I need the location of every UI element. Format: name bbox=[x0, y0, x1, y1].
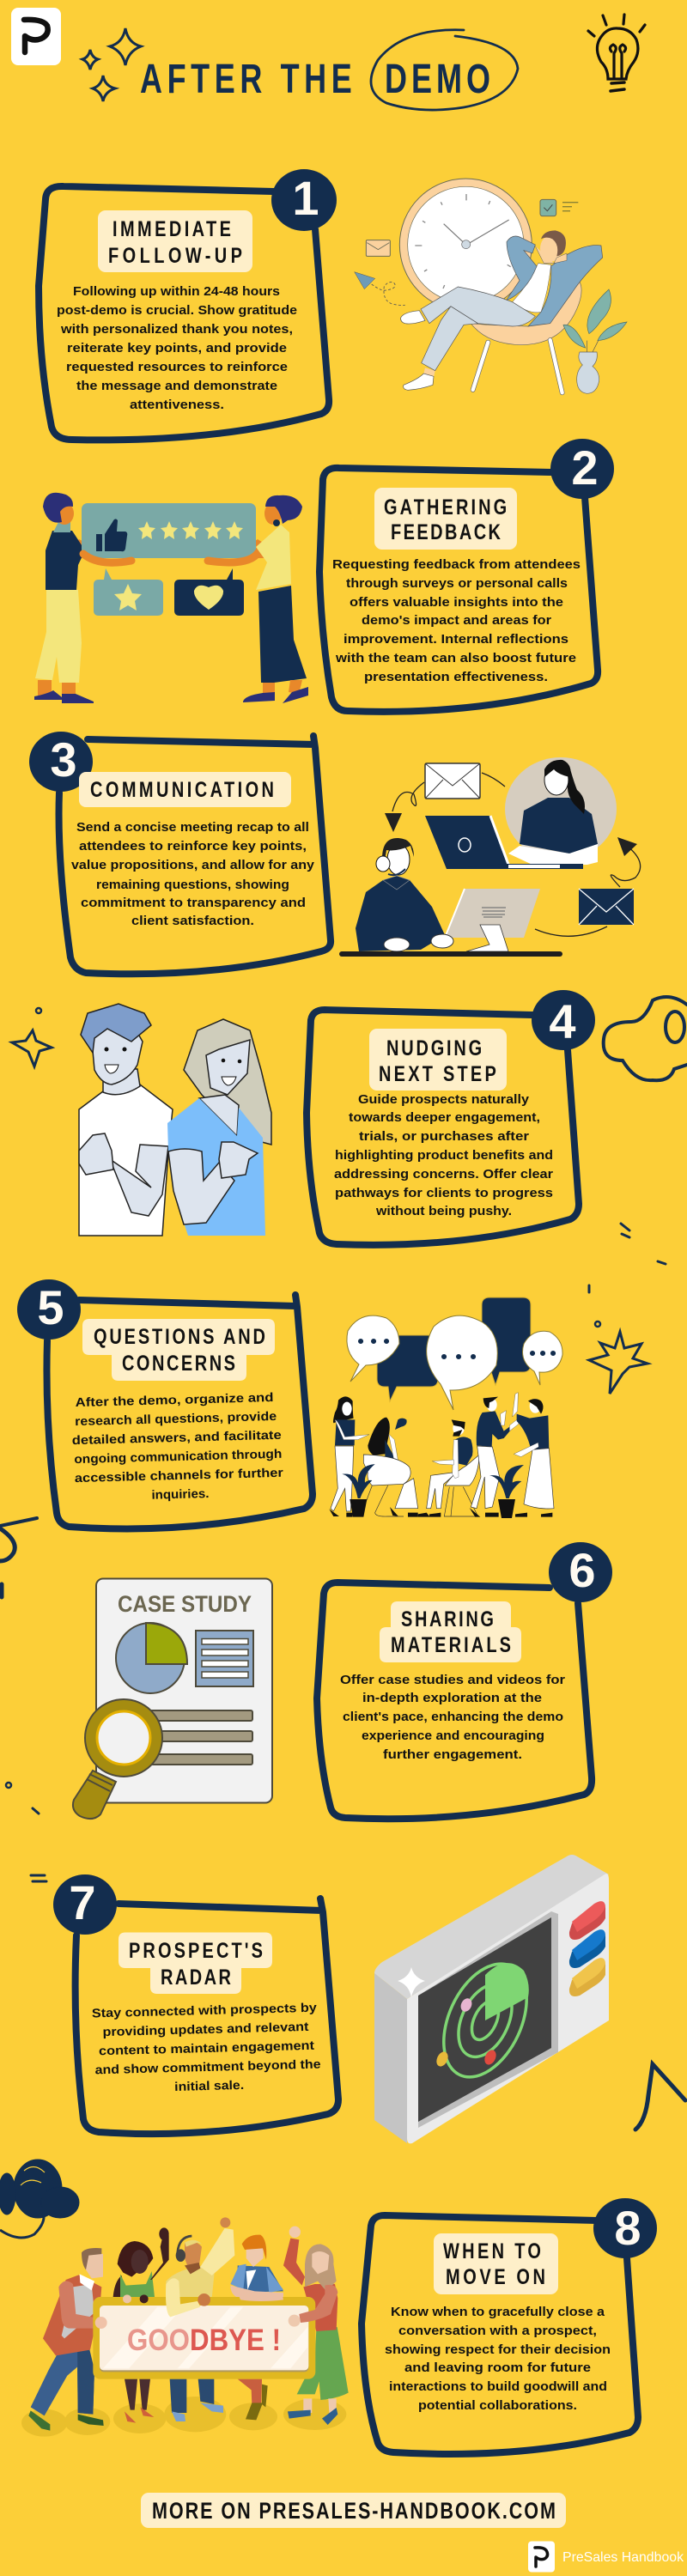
body text: interactions to build goodwill and bbox=[389, 2380, 607, 2394]
body text: offers valuable insights into the bbox=[350, 596, 563, 610]
title: DEMO bbox=[385, 56, 490, 101]
number badge: 4 bbox=[549, 994, 576, 1048]
heading bbox=[369, 1029, 507, 1091]
footer logo bbox=[528, 2542, 684, 2573]
number badge bbox=[17, 1279, 81, 1340]
icon: light bulb bbox=[588, 15, 645, 91]
body text bbox=[57, 285, 297, 412]
number badge: 8 bbox=[614, 2201, 641, 2255]
body text: initial sale. bbox=[174, 2079, 244, 2094]
decoration: right side doodles bbox=[0, 997, 687, 2129]
heading bbox=[119, 1932, 272, 1994]
heading bbox=[82, 1319, 275, 1381]
body text: post-demo is crucial. Show gratitude bbox=[57, 304, 297, 318]
panel outline bbox=[46, 1295, 313, 1528]
panel 2: gathering feedback bbox=[34, 439, 614, 712]
heading bbox=[434, 2233, 558, 2294]
panel outline bbox=[317, 1583, 592, 1819]
heading: RADAR bbox=[161, 1965, 231, 1990]
body text: client's pace, enhancing the demo bbox=[343, 1710, 563, 1724]
panel outline bbox=[59, 736, 331, 974]
body text: with the team can also boost future bbox=[335, 652, 576, 665]
body text: requested resources to reinforce bbox=[66, 361, 288, 374]
heading: MATERIALS bbox=[391, 1633, 511, 1657]
body text: further engagement. bbox=[383, 1748, 522, 1762]
panel 4: nudging next step bbox=[79, 990, 595, 1245]
sign text: GOODBYE ! bbox=[127, 2324, 281, 2357]
panel outline bbox=[76, 1899, 338, 2134]
number badge: 5 bbox=[37, 1280, 64, 1334]
number badge bbox=[532, 990, 595, 1050]
body text: After the demo, organize and bbox=[75, 1391, 274, 1410]
panel outline bbox=[362, 2215, 638, 2454]
number badge bbox=[53, 1874, 117, 1935]
body text bbox=[334, 1093, 553, 1218]
body text bbox=[385, 2306, 611, 2413]
panel outline bbox=[39, 186, 329, 440]
body text: attendees to reinforce key points, bbox=[79, 840, 307, 854]
body text: detailed answers, and facilitate bbox=[72, 1429, 282, 1448]
body text bbox=[70, 1391, 284, 1504]
panel 6: sharing materials bbox=[73, 1542, 612, 1819]
body text: trials, or purchases after bbox=[359, 1130, 529, 1144]
panel 8: when to move on bbox=[362, 2198, 657, 2454]
footer call to action bbox=[141, 2493, 566, 2528]
header bbox=[11, 8, 645, 110]
body text: value propositions, and allow for any bbox=[71, 859, 314, 872]
panel outline bbox=[307, 1010, 579, 1245]
heading: SHARING bbox=[401, 1607, 494, 1631]
heading bbox=[374, 488, 517, 550]
body text: the message and demonstrate bbox=[76, 380, 277, 393]
heading: CONCERNS bbox=[122, 1352, 235, 1376]
number badge bbox=[550, 439, 614, 499]
body text: pathways for clients to progress bbox=[335, 1187, 553, 1200]
body text: addressing concerns. Offer clear bbox=[334, 1168, 553, 1182]
number badge bbox=[549, 1542, 612, 1602]
body text: Stay connected with prospects by bbox=[92, 2002, 317, 2020]
number badge bbox=[271, 169, 337, 231]
body text: and leaving room for future bbox=[404, 2361, 591, 2375]
body text: towards deeper engagement, bbox=[349, 1111, 540, 1125]
heading: FOLLOW-UP bbox=[108, 244, 242, 268]
body text: experience and encouraging bbox=[362, 1729, 544, 1743]
body text: Send a concise meeting recap to all bbox=[76, 821, 309, 835]
body text: client satisfaction. bbox=[131, 914, 254, 928]
logo bbox=[11, 8, 61, 65]
body text: without being pushy. bbox=[375, 1205, 512, 1218]
body text bbox=[71, 821, 314, 928]
body text: remaining questions, showing bbox=[96, 878, 289, 892]
illustration: man relaxing by clock bbox=[355, 179, 627, 393]
illustration: case study document bbox=[73, 1578, 272, 1819]
body text: in-depth exploration at the bbox=[362, 1692, 542, 1705]
number badge: 7 bbox=[69, 1875, 96, 1929]
decoration: scribble bbox=[0, 2160, 79, 2238]
illustration: team discussion bbox=[329, 1393, 554, 1518]
heading: PROSPECT'S bbox=[129, 1939, 263, 1963]
icon: sparkles bbox=[82, 28, 141, 101]
illustration: email exchange bbox=[339, 757, 641, 957]
body text bbox=[340, 1674, 565, 1762]
heading: MOVE ON bbox=[446, 2265, 545, 2289]
heading: FEEDBACK bbox=[391, 520, 502, 544]
body text: and show commitment beyond the bbox=[94, 2058, 321, 2077]
body text bbox=[332, 558, 581, 684]
number badge: 1 bbox=[292, 171, 319, 225]
body text: through surveys or personal calls bbox=[346, 577, 568, 591]
body text: presentation effectiveness. bbox=[364, 671, 548, 684]
body text: providing updates and relevant bbox=[102, 2020, 309, 2039]
heading bbox=[79, 772, 291, 807]
panel outline bbox=[319, 468, 598, 712]
body text: Following up within 24-48 hours bbox=[73, 285, 280, 299]
number badge bbox=[593, 2198, 657, 2258]
heading bbox=[380, 1601, 521, 1662]
body text: with personalized thank you notes, bbox=[60, 323, 293, 337]
body text: content to maintain engagement bbox=[99, 2039, 314, 2058]
illustration: goodbye group bbox=[21, 2217, 349, 2437]
body text: commitment to transparency and bbox=[81, 896, 306, 910]
illustration: two people holding rating card bbox=[34, 493, 308, 703]
illustration: speech bubbles bbox=[347, 1297, 562, 1410]
body text: improvement. Internal reflections bbox=[344, 633, 568, 647]
heading: GATHERING bbox=[384, 495, 507, 519]
heading: QUESTIONS AND bbox=[94, 1325, 265, 1349]
number badge bbox=[29, 732, 93, 792]
title: AFTER THE bbox=[140, 56, 352, 101]
heading: NUDGING bbox=[386, 1036, 482, 1060]
body text: Requesting feedback from attendees bbox=[332, 558, 581, 572]
panel 5: questions and concerns bbox=[17, 1279, 562, 1528]
body text: inquiries. bbox=[151, 1487, 210, 1503]
number badge: 2 bbox=[571, 440, 599, 495]
body text: showing respect for their decision bbox=[385, 2343, 611, 2357]
panel 3: communication bbox=[29, 732, 641, 974]
illustration: case study document: CASE STUDY bbox=[118, 1591, 252, 1617]
panel 1: immediate follow-up bbox=[39, 169, 627, 440]
body text: highlighting product benefits and bbox=[335, 1149, 553, 1163]
body text bbox=[92, 2002, 321, 2096]
body text: research all questions, provide bbox=[75, 1410, 277, 1429]
heading: COMMUNICATION bbox=[90, 778, 274, 802]
footer call to action: MORE ON PRESALES-HANDBOOK.COM bbox=[152, 2499, 556, 2524]
title bbox=[140, 30, 518, 110]
number badge: 6 bbox=[568, 1543, 596, 1597]
illustration: radar device bbox=[374, 1855, 609, 2143]
body text: Guide prospects naturally bbox=[358, 1093, 529, 1107]
heading: WHEN TO bbox=[443, 2239, 541, 2263]
footer logo: PreSales Handbook bbox=[562, 2550, 684, 2565]
panel 7: prospect's radar bbox=[53, 1855, 609, 2143]
heading bbox=[98, 210, 252, 272]
body text: demo's impact and areas for bbox=[362, 614, 551, 628]
number badge: 3 bbox=[50, 732, 77, 787]
body text: attentiveness. bbox=[130, 398, 224, 412]
illustration: two people pointing bbox=[79, 1004, 271, 1236]
body text: Offer case studies and videos for bbox=[340, 1674, 565, 1687]
body text: Know when to gracefully close a bbox=[391, 2306, 605, 2319]
body text: reiterate key points, and provide bbox=[67, 342, 287, 355]
body text: accessible channels for further bbox=[75, 1467, 283, 1485]
heading: IMMEDIATE bbox=[112, 217, 231, 241]
body text: conversation with a prospect, bbox=[398, 2324, 597, 2338]
body text: potential collaborations. bbox=[418, 2399, 577, 2413]
heading: NEXT STEP bbox=[379, 1062, 496, 1086]
body text: ongoing communication through bbox=[74, 1448, 282, 1467]
